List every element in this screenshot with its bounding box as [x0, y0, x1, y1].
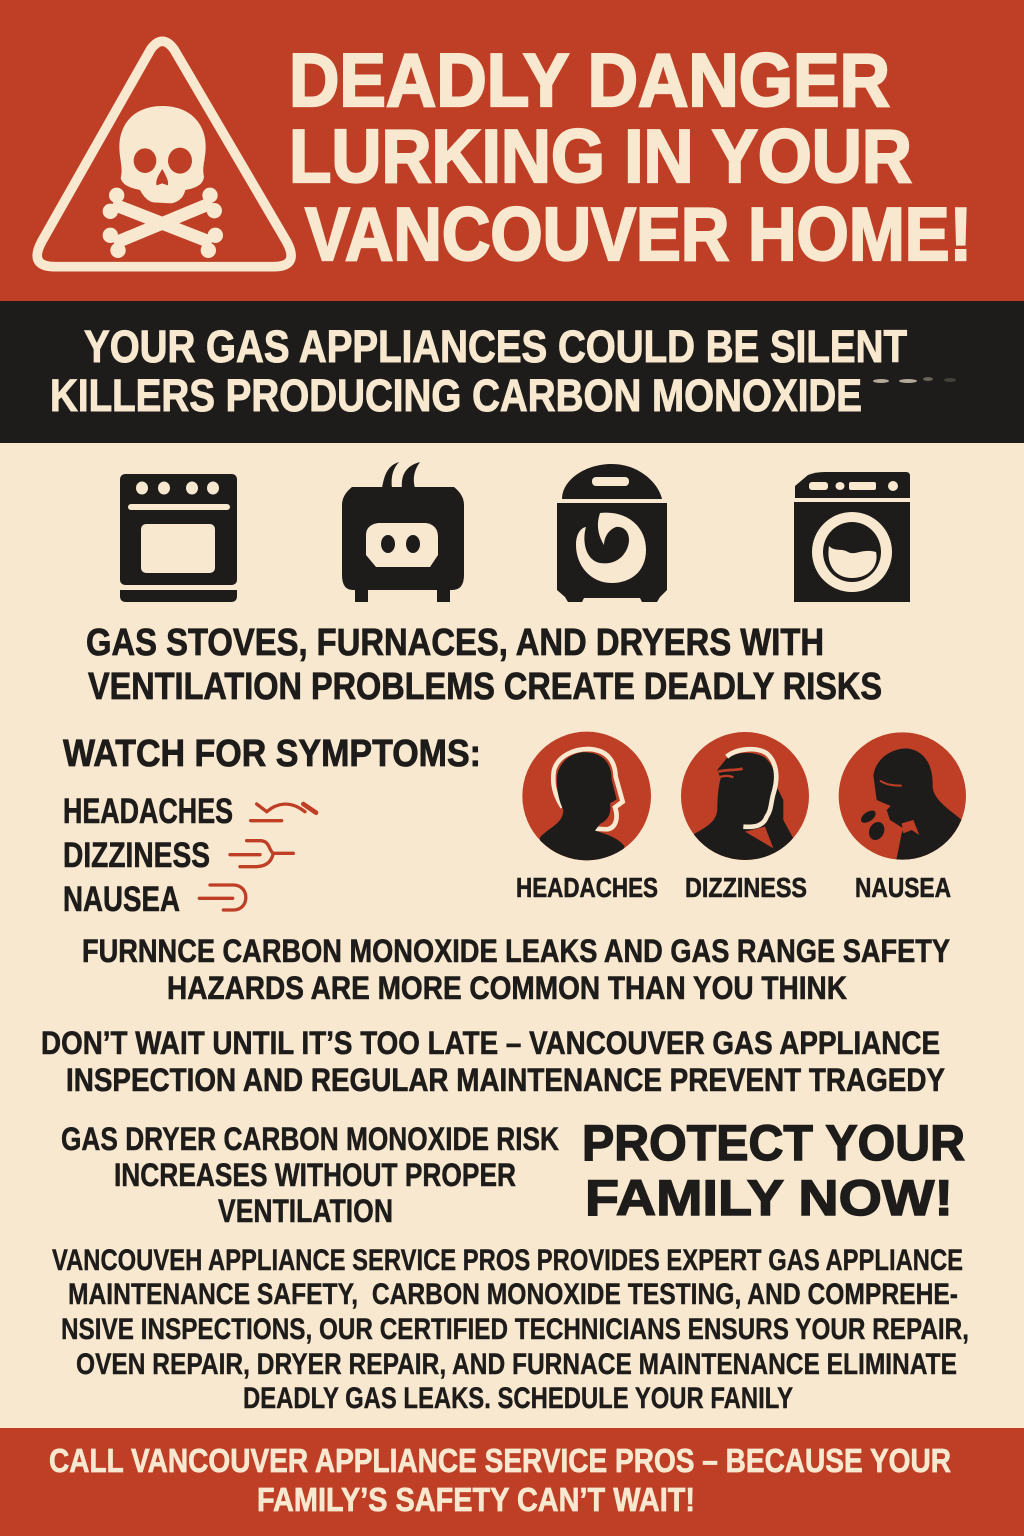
protect your family callout: FAMILY NOW!	[585, 1170, 953, 1226]
symptom illustration labels: HEADACHES	[516, 872, 658, 903]
appliance icons row	[120, 462, 910, 602]
service description paragraph	[52, 1244, 969, 1415]
header banner	[0, 0, 1024, 301]
symptom illustration labels	[516, 872, 951, 903]
subtitle text: KILLERS PRODUCING CARBON MONOXIDE	[50, 370, 862, 421]
footer call to action	[0, 1428, 1024, 1536]
appliance risk statement: VENTILATION PROBLEMS CREATE DEADLY RISKS	[88, 666, 882, 708]
dryer risk statement: INCREASES WITHOUT PROPER	[114, 1157, 516, 1193]
icon: dizziness profile	[681, 732, 809, 863]
dryer risk statement: VENTILATION	[218, 1193, 393, 1229]
symptoms list	[63, 792, 316, 919]
title: LURKING IN YOUR	[289, 114, 912, 198]
subtitle band	[0, 301, 1024, 443]
icon: dryer	[794, 472, 910, 602]
dryer risk statement: GAS DRYER CARBON MONOXIDE RISK	[61, 1121, 559, 1157]
icon: furnace	[342, 462, 464, 602]
icon: nausea profile	[839, 732, 966, 863]
footer text: FAMILY’S SAFETY CAN’T WAIT!	[257, 1481, 695, 1518]
symptoms list: HEADACHES	[63, 792, 233, 831]
furnace leaks statement	[82, 933, 950, 1006]
appliance risk statement: GAS STOVES, FURNACES, AND DRYERS WITH	[86, 622, 824, 664]
symptoms list: NAUSEA	[63, 880, 180, 919]
title	[289, 38, 972, 276]
symptoms list: DIZZINESS	[63, 836, 210, 875]
inspection warning	[41, 1025, 945, 1098]
dryer risk statement	[61, 1121, 559, 1229]
symptoms heading: WATCH FOR SYMPTOMS:	[63, 733, 481, 775]
symptom illustration labels: DIZZINESS	[685, 872, 807, 903]
icon: washing machine with swirl	[557, 464, 667, 602]
service description paragraph: DEADLY GAS LEAKS. SCHEDULE YOUR FANILY	[243, 1382, 793, 1415]
subtitle text: YOUR GAS APPLIANCES COULD BE SILENT	[84, 321, 907, 372]
protect your family callout	[582, 1115, 965, 1226]
subtitle text	[50, 321, 907, 421]
footer text	[49, 1442, 951, 1518]
symptom illustration labels: NAUSEA	[855, 872, 951, 903]
icon: stove	[120, 474, 237, 602]
icon: skull and crossbones warning triangle	[37, 41, 291, 267]
symptom illustrations	[522, 732, 966, 863]
furnace leaks statement: HAZARDS ARE MORE COMMON THAN YOU THINK	[167, 970, 847, 1006]
title: DEADLY DANGER	[289, 38, 890, 122]
protect your family callout: PROTECT YOUR	[582, 1115, 965, 1171]
icon: headache profile	[522, 732, 651, 863]
icon: red squiggle marks	[199, 804, 316, 910]
appliance risk statement	[86, 622, 882, 708]
